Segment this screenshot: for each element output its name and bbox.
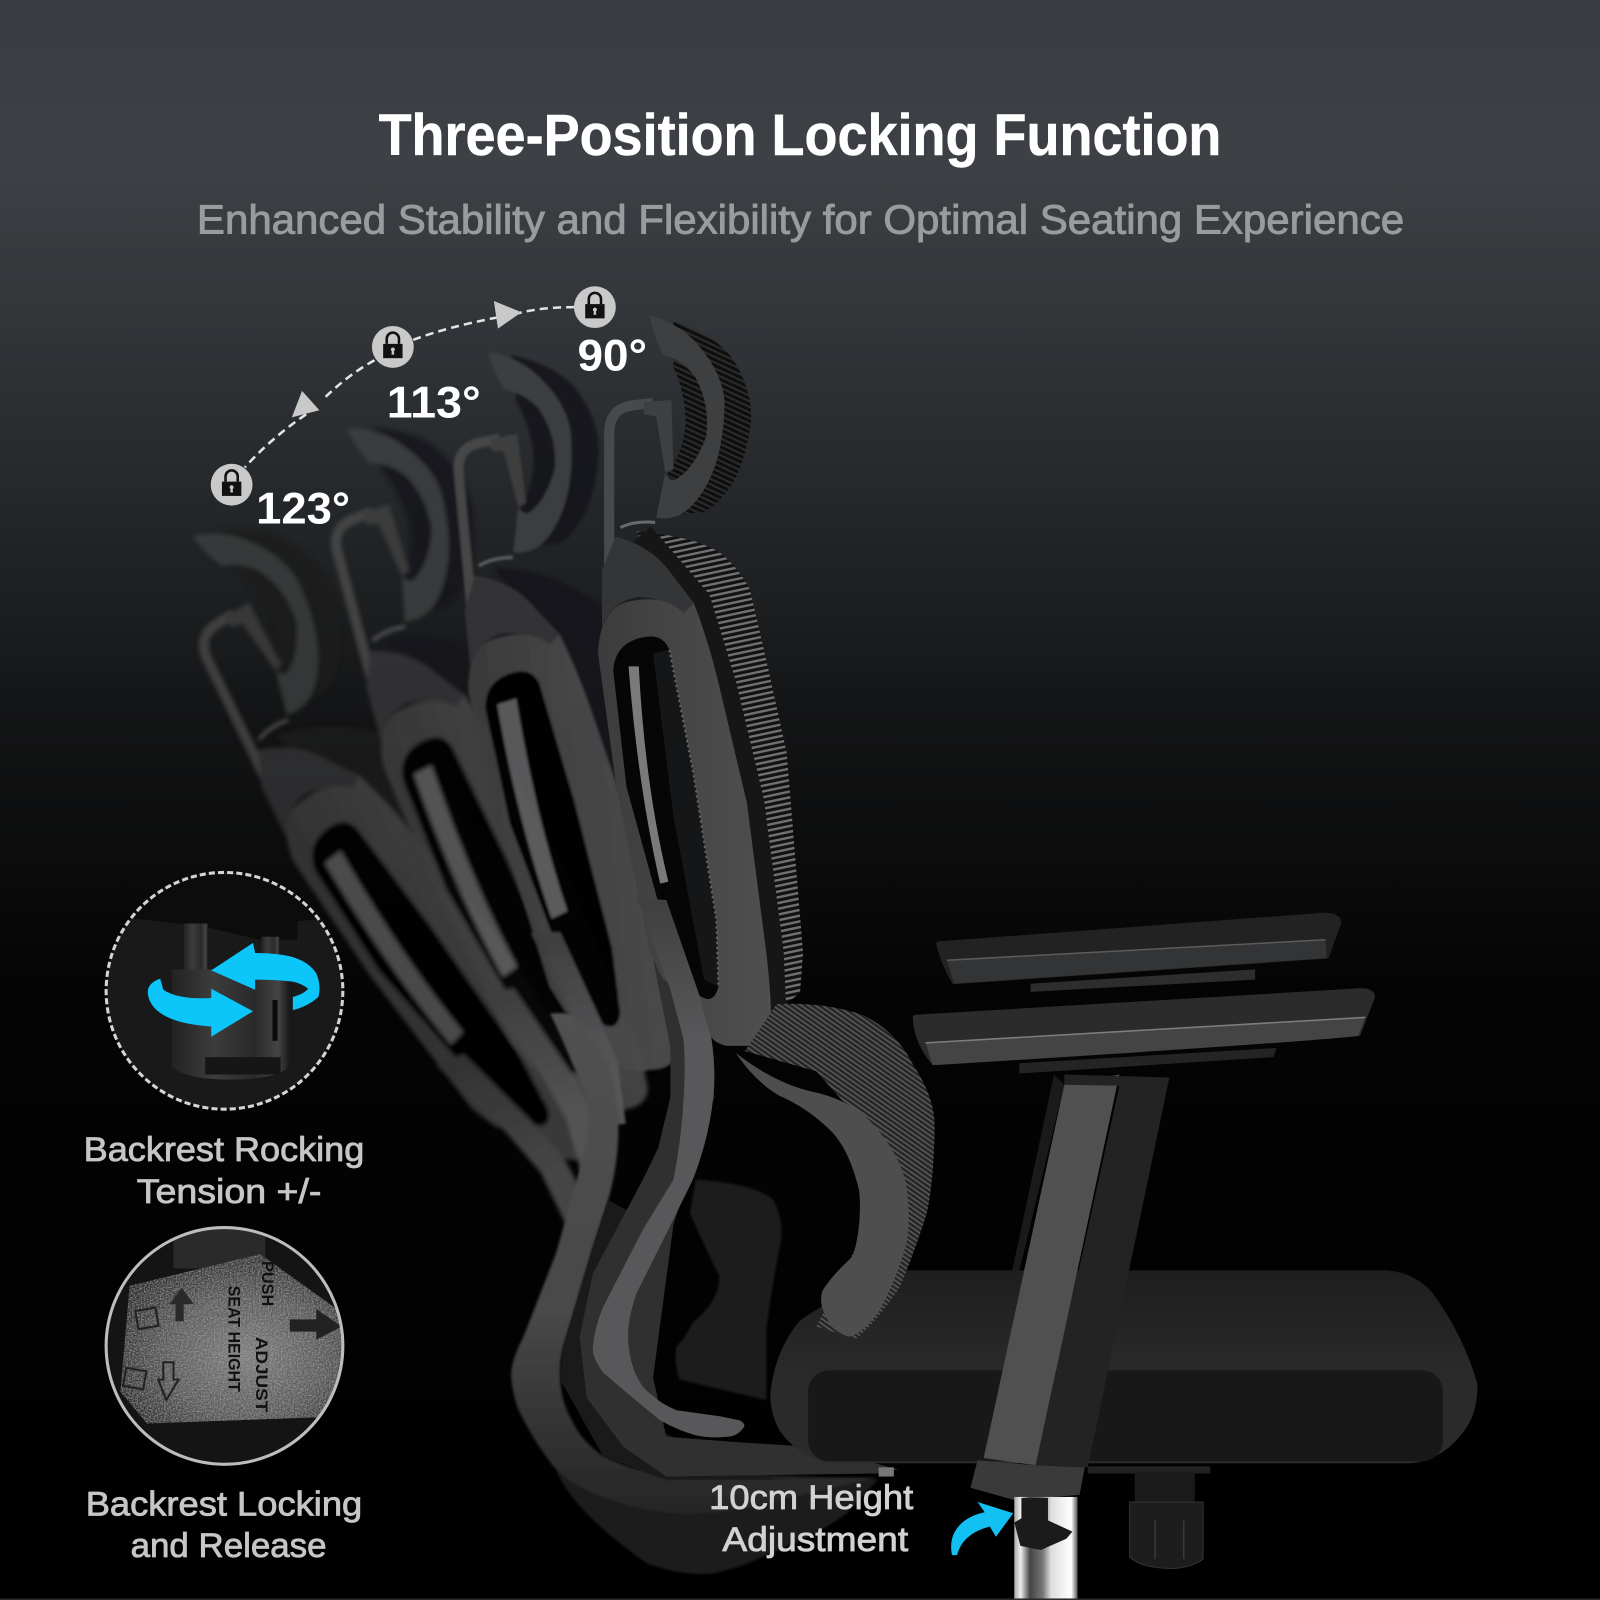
caption: backrest rocking tension: Backrest Rocking — [84, 1131, 364, 1169]
seat side panel — [808, 1370, 1443, 1461]
rear seat column — [1130, 1472, 1203, 1568]
caption: backrest rocking tension — [84, 1131, 364, 1211]
mounting plate — [133, 874, 316, 940]
arrowhead left — [292, 391, 319, 417]
tension rod — [184, 923, 208, 974]
caption: backrest locking: and Release — [131, 1527, 327, 1565]
front spine — [593, 898, 744, 1437]
subtitle: Enhanced Stability and Flexibility for Optimal Seating Experience — [197, 197, 1404, 243]
icon: lower rotation arrow — [148, 979, 253, 1037]
lower ghost base shadow — [556, 1469, 878, 1574]
icon: up arrow — [169, 1288, 194, 1321]
lever embossed PUSH: PUSH — [258, 1261, 276, 1306]
post foot cap — [970, 1460, 1085, 1500]
icon: lower seat glyph — [123, 1368, 146, 1389]
height label — [709, 1479, 914, 1559]
ghost chair back at 123 degrees — [146, 469, 673, 1261]
headrest mesh — [663, 321, 751, 515]
lumbar support — [736, 1004, 935, 1339]
title: Three-Position Locking Function — [379, 103, 1221, 168]
armrest post — [970, 1074, 1169, 1500]
icon: down arrow — [158, 1362, 179, 1400]
central ghost lumbar swirl — [676, 1180, 782, 1400]
ghost chair back at 113 degrees — [436, 337, 715, 1135]
angle label 113: 113° — [387, 376, 481, 427]
tension barrel — [171, 969, 290, 1080]
seat cushion — [770, 1270, 1478, 1463]
caption: backrest locking — [86, 1485, 362, 1565]
angle label 123: 123° — [256, 482, 350, 533]
lever embossed SEAT HEIGHT: SEAT HEIGHT — [224, 1286, 242, 1392]
frame and headrest — [598, 315, 771, 1046]
dark back shell — [580, 959, 898, 1477]
arrowhead right — [494, 301, 521, 329]
icon: upper seat glyph — [135, 1308, 159, 1329]
gas cylinder — [1014, 1497, 1078, 1600]
icon: right arrow — [290, 1309, 342, 1340]
height label: 10cm Height — [709, 1479, 914, 1517]
height label: Adjustment — [722, 1521, 909, 1559]
icon: lock 113 degrees — [372, 326, 414, 368]
front chair back at 90 degrees — [598, 315, 803, 1046]
inset: backrest rocking tension — [102, 867, 347, 1109]
caption: backrest locking: Backrest Locking — [86, 1485, 362, 1523]
icon: upper rotation arrow — [211, 943, 320, 1010]
lumbar plate — [736, 1053, 909, 1337]
armrest upper — [939, 915, 1339, 992]
recline path arrows — [245, 301, 574, 467]
lumbar mesh — [745, 1004, 935, 1339]
height lever — [1014, 1498, 1072, 1550]
lever embossed ADJUST: ADJUST — [252, 1337, 270, 1412]
caption: backrest rocking tension: Tension +/- — [137, 1173, 321, 1211]
icon: lock 123 degrees — [211, 464, 253, 506]
ring — [106, 1228, 343, 1464]
ghost chair back at intermediate recline — [296, 388, 697, 1196]
back mesh — [637, 532, 803, 1020]
dashed ring — [106, 872, 343, 1109]
dark gap between spines — [560, 1200, 776, 1480]
seat mechanism bar and tab — [879, 1466, 1210, 1477]
angle label 90: 90° — [578, 329, 647, 380]
armrest lower — [915, 991, 1372, 1073]
icon: lock 90 degrees — [574, 286, 616, 328]
icon: cyan height arrow — [951, 1502, 1013, 1555]
ghost lower spine — [511, 1013, 878, 1513]
lever plate — [120, 1254, 347, 1423]
inset: backrest locking lever photo — [106, 1228, 347, 1464]
